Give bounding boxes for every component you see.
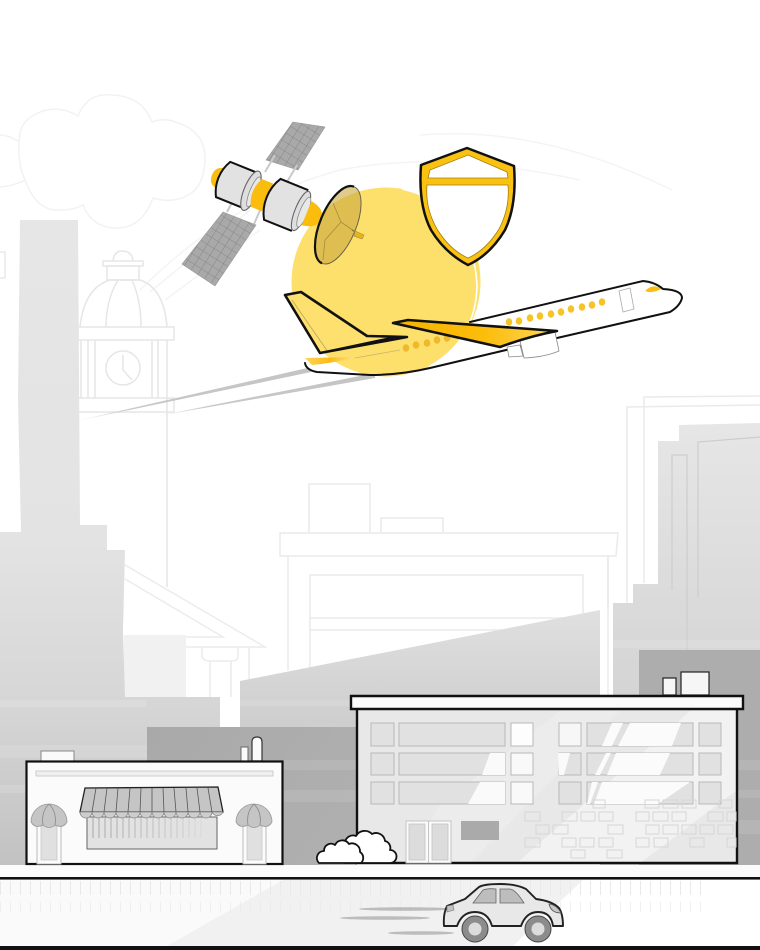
wall light streak wide	[405, 711, 620, 863]
car	[444, 884, 563, 942]
wall	[357, 710, 737, 863]
road edge line	[0, 877, 760, 880]
airplane body fill	[305, 281, 682, 375]
windows	[371, 723, 721, 804]
right arched door	[236, 804, 272, 864]
road bottom line	[0, 946, 760, 950]
shop sign stripe	[36, 771, 273, 776]
car speed lines	[340, 907, 454, 935]
dark silhouette band left	[147, 727, 357, 865]
sun	[292, 188, 480, 376]
small faint rectangle at left edge	[0, 252, 5, 278]
left window reflections	[468, 753, 570, 804]
rear wheel	[462, 916, 488, 942]
window reflections	[587, 723, 690, 804]
clock tower outline	[78, 251, 174, 587]
contrails	[67, 366, 375, 423]
background office outline	[280, 396, 760, 700]
bricks	[525, 800, 736, 858]
wall outline	[357, 710, 737, 863]
satellite body	[204, 155, 330, 240]
shop wall	[26, 762, 282, 864]
cloud outline	[0, 95, 205, 228]
faint motion arcs	[140, 134, 672, 300]
airplane	[285, 281, 682, 375]
engine	[507, 332, 559, 358]
roof	[351, 696, 743, 709]
panel struts	[227, 155, 297, 224]
dark silhouette band right	[639, 650, 760, 865]
windows rear	[403, 334, 450, 352]
curb ticks	[0, 888, 702, 907]
shop window	[87, 817, 217, 849]
entrance door	[406, 821, 451, 863]
shield	[420, 148, 515, 265]
road surface light band	[167, 880, 583, 946]
fuselage outline	[305, 281, 682, 375]
large building	[351, 672, 743, 863]
horizontal stabilizer	[305, 357, 355, 365]
road surface left	[0, 880, 760, 946]
front wheel	[525, 916, 551, 942]
grey silhouette middle	[240, 610, 600, 727]
column line	[607, 556, 609, 695]
solar panel top	[266, 122, 325, 170]
wall light streak	[517, 711, 737, 863]
tail fin	[285, 292, 407, 353]
background house outline	[125, 565, 265, 697]
grey silhouette right	[613, 423, 760, 727]
house wall panel	[124, 635, 186, 697]
awning	[80, 787, 223, 818]
rear light	[447, 905, 454, 912]
roof box	[41, 751, 74, 761]
door	[619, 288, 634, 312]
car body	[444, 884, 563, 926]
grey city silhouette left	[0, 220, 220, 865]
lower grey band behind large building	[600, 727, 639, 865]
rooftop boxes	[663, 672, 709, 695]
satellite	[182, 122, 371, 286]
road surface white right	[513, 880, 760, 946]
roof vent tall	[252, 737, 262, 761]
horizontal tonal bands	[0, 640, 760, 793]
bushes	[317, 831, 397, 863]
fuselage centre line	[355, 350, 400, 358]
ground strip	[0, 865, 760, 877]
shop	[26, 737, 282, 864]
tail inner line	[292, 300, 328, 352]
sun rim highlight	[402, 189, 477, 366]
car windows	[473, 889, 524, 903]
headlight	[549, 904, 561, 913]
satellite dish	[305, 180, 371, 270]
wing	[393, 320, 557, 347]
roof vent small	[241, 747, 248, 761]
left arched door	[31, 804, 67, 864]
windows front	[506, 298, 605, 326]
solar panel bottom	[182, 212, 256, 286]
cockpit window	[645, 286, 661, 292]
dark band tonal stripes	[283, 760, 760, 834]
right silhouette inner lines	[672, 437, 760, 650]
shop window reflections	[92, 818, 205, 838]
white column gap	[221, 610, 613, 727]
grey sign	[461, 821, 499, 840]
